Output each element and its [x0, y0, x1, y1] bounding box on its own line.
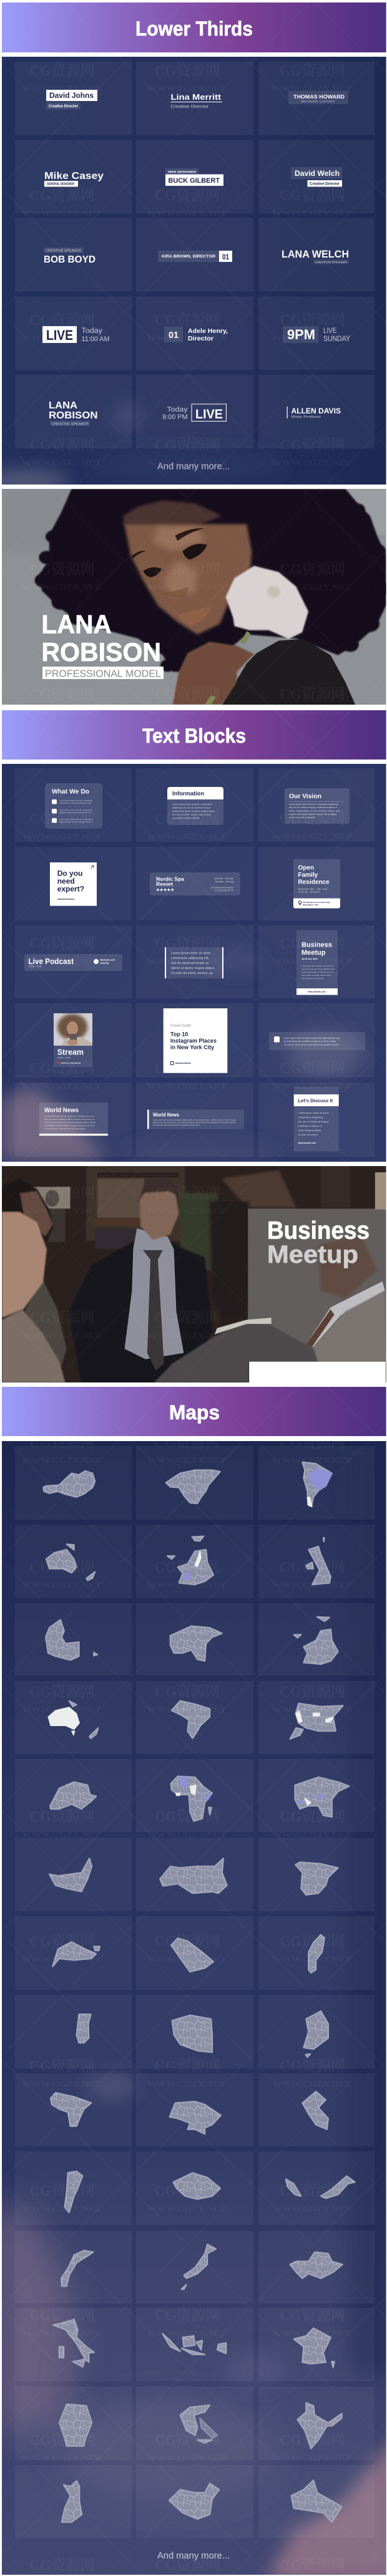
caption: and many more: And many more...: [157, 461, 230, 471]
text block: Let's Discuss It: www.domain.com: [297, 1142, 316, 1144]
text block: Business Meetup: nisi ut aliquip ex ea commodo: [301, 977, 324, 980]
text block: Top 10 Instagram Places: Instagram Places: [170, 1038, 217, 1044]
panel: lower thirds: [0, 57, 386, 493]
panel: text blocks: [0, 764, 386, 1166]
lower third: Thomas Howard: WEB DESIGNER, ILLUSTRATOR: [301, 100, 335, 103]
text block: Top 10 Instagram Places: in New York City: [170, 1044, 214, 1050]
text block: What We Do: [45, 783, 102, 829]
text block: World News with bottom bar: in reprehenderit in voluptate velit esse cillum dolore: [44, 1127, 86, 1130]
portrait illustration: [2, 489, 386, 705]
lower third: Lina Merritt: [171, 93, 222, 109]
text block: What We Do: Lorem ipsum dolor sit amet, consectetur: [59, 799, 92, 802]
map: Switzerland: [50, 1782, 96, 1809]
map: Japan: [182, 2244, 216, 2289]
lower third: Today 9:00 PM Live: [162, 404, 226, 422]
lower third: Today 9:00 PM Live: Today: [167, 406, 188, 413]
photo: Business Meetup: [2, 1166, 387, 1382]
lower third: Thomas Howard: THOMAS HOWARD: [293, 94, 345, 100]
lower third: Kira Brown: 01: [222, 254, 230, 261]
text block: Business Meetup: 16-20 Dec 2021: [301, 958, 318, 960]
text block: Let's Discuss It: elit, sed do eiusmod tempor: [298, 1120, 329, 1123]
text block: Nordic Spa Resort: ★★★★★: [156, 888, 174, 892]
lower third: Mike Casey: Mike Casey: [44, 171, 104, 181]
text block: What We Do: adipiscing elit, sed do eiusmod tempor: [59, 811, 91, 814]
title: Business Meetup: [267, 1217, 370, 1268]
text block: wide lorem note: Lorem ipsum dolor sit amet, consectetur adipiscing elit, sed: [283, 1037, 340, 1040]
text block: lorem with side bars: sed do eiusmod tempor ut: [171, 962, 209, 965]
map: United States: [290, 1704, 343, 1739]
lower third: Today 9:00 PM Live: 9:00 PM: [162, 413, 187, 421]
text block: Information: exercitation ullamco laboris: [172, 817, 200, 819]
text block: Live Podcast: [24, 954, 122, 971]
text block: Open Family Residence: 500 Ellington Avenue Brooklyn: [303, 901, 330, 904]
map: Austria: [43, 1471, 95, 1497]
panel background: [2, 764, 386, 1162]
text block: Let's Discuss It: [294, 1087, 339, 1151]
text block: Nordic Spa Resort: +1 (718) 456-34-12: [213, 889, 233, 892]
map: Netherlands: [171, 1938, 213, 1972]
map: Asia with highlights: [295, 1777, 349, 1817]
lower third: Allen Davis: ALLEN DAVIS: [291, 408, 341, 415]
map: Argentina: [65, 2171, 82, 2212]
text block: Top 10 Instagram Places: samantumarket: [175, 1062, 192, 1064]
lower third: David Welch: David Welch: [295, 170, 340, 178]
text block: Open Family Residence: 10:00 am - 05:00 pm: [298, 891, 320, 894]
lower third: Buck Gilbert: [165, 168, 223, 186]
text block: Live Podcast: 12PM - 2:PM: [29, 965, 41, 968]
map: Sweden: [308, 1935, 325, 1973]
text block: What We Do: What We Do: [52, 788, 89, 796]
lower third: Adele Henry: [164, 327, 228, 342]
map: Czech Republic: [174, 2173, 220, 2199]
lower third: Live Today: Today: [81, 327, 102, 335]
map: South Korea: [303, 2011, 328, 2057]
text block: What We Do: adipiscing elit, sed do eiusmod tempor: [59, 802, 91, 804]
text block: Nordic Spa Resort: Nordic Spa: [156, 876, 184, 882]
map: Europe with highlights: [167, 1536, 213, 1585]
text block: World News with side bar: aliqua. Ut enim ad minim veniam, quis nostrud exercitation ullamco laboris nisi ut aliquip ex ea commodo consequat: [153, 1121, 236, 1124]
text block: Let's Discuss It: consectetur adipiscing: [298, 1116, 323, 1119]
map: Peru: [302, 2091, 328, 2130]
lower third: Bob Boyd: BOB BOYD: [44, 254, 96, 265]
text block: Let's Discuss It: Ut enim ad minim: [298, 1133, 318, 1136]
map rows 9 to 14: [51, 2091, 355, 2522]
text block: World News with bottom bar: [39, 1102, 108, 1136]
panel: maps: [0, 1441, 387, 2576]
header: Maps: Maps: [169, 1401, 220, 1424]
lower third: David Welch: Creative Director: [310, 182, 340, 186]
text block: lorem with side bars: labore et dolore magna aliqua.: [171, 967, 215, 970]
lower third: Live Today: [42, 326, 110, 343]
lower third: Lina Merritt: Creative Director: [171, 104, 209, 109]
text block: Our Vision: dolore magna aliqua. Ut enim ad minim veniam, quis: [289, 809, 340, 812]
lower third: Live Today: 11:00 AM: [81, 335, 110, 343]
lower third: Kira Brown: KIRA BROWN, DIRECTOR: [162, 254, 215, 259]
map: United Arab Emirates: [49, 1858, 92, 1892]
lower third: Allen Davis: Music Producer: [291, 415, 321, 419]
text block: Business Meetup: quis nostrud exercitation ullamco laboris: [301, 974, 331, 977]
lower third: Lana Welch: LANA WELCH: [282, 248, 349, 260]
text block: Nordic Spa Resort: Resort: [156, 881, 173, 887]
map: Italy: [53, 2320, 94, 2367]
map: Ukraine: [170, 2101, 221, 2134]
panel background: [2, 57, 386, 485]
text block: Our Vision: Our Vision: [289, 793, 321, 800]
map: Africa: [171, 1776, 212, 1821]
title: Business Meetup: Meetup: [267, 1241, 358, 1268]
map: Poland: [172, 2015, 212, 2052]
text block: lorem with side bars: Ut enim ad minim veniam, qu: [171, 972, 213, 975]
text block: Stream: 12PM - 3:PM: [57, 1057, 71, 1059]
title: LANA ROBISON: [41, 610, 161, 667]
text block: Our Vision: nostrud exercitation ullamco laboris nisi ut aliquip: [289, 813, 336, 816]
map: India: [297, 2403, 342, 2449]
text block: Do you need expert: Do you: [57, 869, 82, 878]
lower third: Today 9:00 PM Live: LIVE: [195, 407, 223, 422]
map rows 3 to 8: [46, 1617, 349, 2057]
text block: Business Meetup: [296, 930, 338, 995]
photo: Lana Robison portrait with title: [2, 489, 387, 705]
text block: Do you need expert: [50, 862, 97, 906]
lower third: Adele Henry: Director: [188, 335, 213, 342]
text block: Information: Lorem ipsum dolor sit amet, consectetur: [172, 803, 213, 806]
text block: Live Podcast: Live Podcast: [29, 957, 74, 966]
text block: Information: Ut enim ad minim veniam, quis nostrud: [172, 813, 211, 816]
text block: Stream: Stream: [57, 1048, 84, 1057]
text block: lorem with side bars: Lorem ipsum dolor sit amet,: [171, 952, 211, 955]
text block: Do you need expert: samansumarket: [57, 898, 75, 900]
text block: Our Vision: elit, sed do eiusmod tempor incididunt ut labore et: [289, 806, 337, 809]
text block: Let's Discuss It: incididunt ut labore et: [298, 1124, 322, 1127]
text block: Let's Discuss It: Lorem ipsum dolor sit amet,: [298, 1111, 329, 1114]
lower third: Live Today: LIVE: [46, 327, 73, 343]
map: Finland: [62, 2481, 82, 2522]
lower third: 9PM Live Sunday: LIVE: [323, 327, 337, 335]
lower third: Allen Davis: [287, 407, 341, 419]
text block: Open Family Residence: [293, 859, 340, 909]
text block: wide lorem note: Ut enim ad minim veniam quis nostrud exercitation ullamco: [283, 1044, 339, 1046]
lower third: Buck Gilbert: BUCK GILBERT: [169, 177, 220, 185]
text block: Business Meetup: Lorem ipsum dolor sit amet, consectetur ad: [301, 965, 334, 967]
lower third: David Welch: [291, 167, 342, 187]
map: Norway: [61, 2250, 93, 2286]
text block: World News with bottom bar: enim ad minim veniam, quis nostrud exercitation ullamco laboris: [44, 1121, 96, 1124]
lower third: Lana Welch: CREATIVE SPEAKER: [315, 261, 348, 264]
map: South America: [302, 1462, 332, 1507]
map: Venezuela: [51, 2093, 91, 2126]
map: Spain: [295, 1862, 338, 1895]
lower third: Adele Henry: 01: [169, 330, 179, 340]
text block: Let's Discuss It: dolore magna aliqua: [298, 1129, 321, 1132]
lower third: Mike Casey: [44, 171, 104, 187]
text block: Nordic Spa Resort: Monday - Sunday: [215, 880, 233, 883]
text block: Live Podcast: facebook.com/: [100, 959, 115, 962]
text block: Our Vision: [285, 788, 350, 824]
meeting scene illustration: [2, 1166, 386, 1382]
map: China: [169, 2483, 219, 2519]
text block: World News with side bar: Duis aute irure dolor in reprehenderit in voluptate velit esse cillum: [153, 1124, 200, 1126]
text block: World News with bottom bar: eiusmod tempor incididunt ut labore et dolore magna aliqua. Ut: [44, 1118, 95, 1121]
lower third: 9PM Live Sunday: SUNDAY: [323, 335, 350, 343]
title: LANA ROBISON: LANA: [41, 610, 112, 639]
lower third: Kira Brown: [158, 251, 232, 262]
map: Asia: [170, 1626, 222, 1661]
title: LANA ROBISON: ROBISON: [41, 637, 161, 667]
lower third: David Johns: Creative Director: [49, 104, 78, 109]
stream photo: [54, 1013, 92, 1046]
text block: Information: adipiscing elit, sed do eiusmod tempor: [172, 807, 211, 809]
lower third: David Johns: [46, 90, 97, 110]
header: Lower Thirds: [2, 2, 386, 52]
text block: wide lorem note: do eiusmod tempor incididunt ut labore et dolore magna: [283, 1040, 336, 1043]
text block: Business Meetup: Meetup: [301, 949, 326, 957]
map: Europe: [294, 1617, 338, 1664]
lower third: Lana Robison: CREATIVE SPEAKER: [51, 423, 89, 427]
map: Denmark: [46, 1619, 97, 1660]
map: France: [294, 2328, 335, 2368]
text block: lorem with side bars: [165, 947, 223, 978]
text block: Our Vision: ex ea commodo consequat: [289, 816, 315, 819]
map: United Kingdom: [306, 1538, 331, 1585]
text block: Business Meetup: www.domain.com: [307, 990, 326, 993]
text block: World News with bottom bar: Lorem ipsum dolor sit amet, consectetur adipiscing elit, sed do: [44, 1115, 94, 1117]
text block: World News with bottom bar: World News: [44, 1106, 79, 1114]
map: Portugal: [77, 2014, 91, 2043]
lower third: Thomas Howard: [288, 91, 348, 104]
map: Greece: [180, 2405, 217, 2443]
text block: Live Podcast: amazing: [100, 962, 109, 964]
text block: Stream: youtube.com/amazing: [61, 1062, 81, 1064]
text block: Business Meetup: elit, sed do eiusmod tempor incididunt ut lab: [301, 968, 335, 970]
map rows 1 to 2: [43, 1462, 332, 1585]
text block: What We Do: Lorem ipsum dolor sit amet, consectetur: [59, 809, 92, 811]
text block: Our Vision: Lorem ipsum dolor sit amet, consectetur adipiscing: [289, 803, 338, 806]
lower third: 9PM Live Sunday: [283, 326, 350, 343]
lower third: Lana Robison: ROBISON: [49, 410, 97, 421]
text block: Information: incididunt ut labore et dolore magna aliqua: [172, 810, 215, 813]
map: Russia: [160, 1858, 227, 1893]
header: Lower Thirds: Lower Thirds: [135, 17, 253, 40]
lower third: Lina Merritt: Lina Merritt: [171, 93, 222, 102]
text block: Open Family Residence: Family: [298, 872, 318, 879]
lower third: Buck Gilbert: WEB DESIGNER: [168, 170, 197, 174]
text block: World News with side bar: Lorem ipsum dolor sit amet, consectetur adipiscing elit, sed do eiusmod tempor incididunt ut labore et dolore magna: [153, 1119, 236, 1121]
text block: Do you need expert: need: [57, 877, 75, 885]
text block: Information: [167, 787, 223, 825]
text block: wide lorem note: [269, 1032, 365, 1050]
lower third: Bob Boyd: CREATIVE SPEAKER: [46, 249, 81, 253]
title: Business Meetup: Business: [267, 1217, 370, 1245]
text block: What We Do: adipiscing elit, sed do eiusmod tempor: [59, 821, 91, 823]
lower third: 9PM Live Sunday: 9PM: [287, 327, 315, 342]
text block: Open Family Residence: Open: [298, 865, 314, 872]
text block: Stream: [54, 1013, 92, 1067]
text block: World News with side bar: World News: [153, 1112, 179, 1118]
text block: Information: Information: [172, 791, 204, 797]
text block: Top 10 Instagram Places: [164, 1008, 227, 1073]
lower third: Lana Robison: [49, 400, 97, 427]
header: Text Blocks: Text Blocks: [142, 725, 246, 747]
text block: Let's Discuss It: Let's Discuss It: [298, 1099, 333, 1103]
text block: lorem with side bars: consectetur adipiscing elit,: [171, 957, 209, 960]
text block: Nordic Spa Resort: 8:00 am - 9:00 pm: [214, 877, 233, 880]
map: Brazil: [172, 1701, 210, 1739]
map: North America: [166, 1470, 220, 1503]
map: Indonesia: [162, 2333, 226, 2355]
lower third: Lana Robison: LANA: [49, 400, 77, 411]
text block: Open Family Residence: December 20th - 24th, 2021: [298, 888, 328, 890]
hair curls: [35, 503, 387, 672]
text block: Business Meetup: dolore magna aliqua. Ut enim ad minim ven: [301, 971, 334, 973]
lower third: Bob Boyd: [44, 248, 96, 265]
lower third: David Johns: David Johns: [49, 92, 94, 100]
text block: Open Family Residence: Washington, USA: [303, 904, 319, 906]
map: Canada: [291, 2480, 342, 2522]
text block: What We Do: Lorem ipsum dolor sit amet, consectetur: [59, 818, 92, 821]
map: Germany: [59, 2404, 92, 2446]
lower third: Adele Henry: Adele Henry,: [188, 327, 228, 335]
panel background: [2, 1441, 386, 2575]
header: Maps: [2, 1387, 386, 1436]
caption: and many more: And many more...: [157, 2550, 230, 2561]
text block: Business Meetup: Business: [301, 942, 332, 949]
text block: Nordic Spa Resort: 24 Fulmnham Avenue: [210, 887, 233, 889]
map: Singapore: [52, 1942, 100, 1967]
map: Kazakhstan: [290, 2252, 343, 2279]
header: Text Blocks: [2, 710, 386, 760]
map: Malaysia: [286, 2176, 355, 2198]
subtitle box: professional model: PROFESSIONAL MODEL: [45, 668, 161, 680]
text block: Nordic Spa Resort: [150, 872, 240, 895]
text block: Top 10 Instagram Places: Travel Guide: [170, 1025, 192, 1028]
text block: Top 10 Instagram Places: Top 10: [170, 1031, 188, 1037]
map: Oceania: [46, 1544, 95, 1580]
text block: Do you need expert: expert?: [57, 884, 84, 893]
text block: Open Family Residence: Residence: [298, 879, 330, 885]
lower third: Mike Casey: GENERAL DESIGNER: [47, 182, 74, 186]
text block: World News with bottom bar: nisi ut aliquip ex ea commodo consequat. Duis aute irure dolor: [44, 1124, 94, 1127]
map: Australia highlighted: [48, 1701, 98, 1739]
text block: World News with side bar: [147, 1109, 244, 1129]
